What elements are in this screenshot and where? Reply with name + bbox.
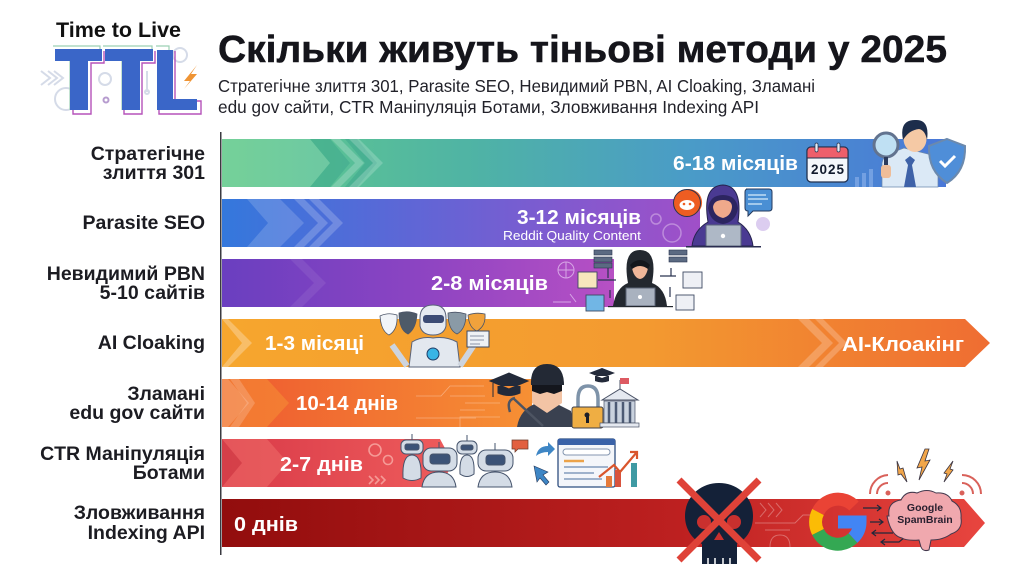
label: Стратегічне злиття 301: злиття 301 bbox=[103, 162, 205, 184]
label: Зламані edu gov: Зламані bbox=[127, 383, 205, 405]
icon: analyst with magnifier and shield bbox=[874, 120, 965, 187]
logo decoration: chevrons and gears bbox=[41, 48, 187, 110]
subtitle bbox=[218, 76, 815, 117]
value: 3-12 місяців bbox=[517, 207, 641, 229]
value: 10-14 днів bbox=[296, 392, 398, 415]
label: AI Cloaking: AI Cloaking bbox=[98, 332, 205, 354]
icon: reddit bubble bbox=[674, 189, 702, 216]
bar: AI Cloaking bbox=[222, 305, 990, 367]
icon: globe and network bbox=[553, 262, 576, 302]
icon: university building bbox=[600, 378, 639, 427]
icon: brain SpamBrain: Google bbox=[907, 502, 943, 514]
chevrons bbox=[222, 439, 288, 487]
icon: browser windows bbox=[578, 272, 702, 311]
label: Indexing API: Indexing API bbox=[88, 522, 205, 544]
icon: signal waves bbox=[870, 475, 981, 494]
bar: Стратегічне злиття 301 bbox=[222, 120, 965, 187]
icon: chat bubble bbox=[745, 189, 772, 216]
red cross bbox=[679, 480, 759, 560]
icon: skull crossed out bbox=[679, 480, 759, 564]
icon: gears bbox=[369, 444, 392, 484]
icon: masks bbox=[380, 312, 485, 335]
bar: Зловживання Indexing API bbox=[222, 449, 985, 564]
subtitle: edu gov сайти, CTR Маніпуляція Ботами, Зловживання Indexing API bbox=[218, 97, 759, 117]
icon: circuit lines bbox=[598, 268, 676, 298]
note: Reddit Quality Content bbox=[503, 229, 642, 243]
label: CTR: Ботами bbox=[133, 462, 205, 484]
label: Стратегічне злиття 301: Стратегічне bbox=[91, 143, 205, 165]
label: Невидимий PBN: Невидимий PBN bbox=[47, 263, 205, 285]
bar: Невидимий PBN bbox=[222, 250, 702, 311]
icon: speech bubble bbox=[512, 440, 528, 452]
subtitle: Стратегічне злиття 301, Parasite SEO, Невидимий PBN, AI Cloaking, Зламані bbox=[218, 76, 815, 96]
logo letters TTL bbox=[55, 49, 197, 110]
icon: robot with document bbox=[392, 305, 489, 367]
circuit lines bbox=[416, 386, 500, 427]
label: Зламані edu gov: edu gov сайти bbox=[69, 402, 205, 424]
value: 6-18 місяців bbox=[673, 152, 798, 175]
bar: CTR Маніпуляція Ботами bbox=[222, 434, 637, 487]
value: 2-8 місяців bbox=[431, 272, 548, 295]
label: Parasite SEO: Parasite SEO bbox=[83, 212, 205, 234]
chevrons bbox=[222, 379, 289, 427]
icon: Google G bbox=[816, 499, 860, 544]
icon: browser search results bbox=[558, 439, 615, 487]
chevrons bbox=[290, 259, 326, 307]
row labels bbox=[40, 143, 205, 544]
logo: Time to Live TTL bbox=[41, 19, 201, 114]
method name: AI-Клоакінг bbox=[842, 334, 964, 356]
icon: brain SpamBrain bbox=[887, 490, 961, 551]
icon: thief bbox=[509, 364, 574, 427]
chevrons bbox=[222, 139, 330, 187]
icon: graduation cap bbox=[490, 373, 528, 397]
bar: Зламані edu gov сайти bbox=[222, 364, 639, 428]
circuit decoration bbox=[755, 503, 813, 547]
icon: data arrows bbox=[863, 505, 905, 545]
label: Indexing API: Зловживання bbox=[74, 502, 205, 524]
title: Скільки живуть тіньові методи у 2025 bbox=[218, 29, 947, 71]
icon: robots bbox=[401, 434, 513, 487]
logo outline: green bbox=[53, 46, 169, 110]
chevrons bbox=[247, 199, 304, 247]
icon: pie chart bbox=[756, 217, 770, 231]
chevrons bbox=[222, 319, 252, 367]
value: 2-7 днів bbox=[280, 454, 363, 476]
axis line bbox=[220, 132, 222, 555]
label: Невидимий PBN: 5-10 сайтів bbox=[100, 282, 205, 304]
icon: gears bbox=[651, 214, 681, 242]
icon: lightning bolts bbox=[897, 449, 953, 482]
value: 1-3 місяці bbox=[265, 333, 364, 355]
icon: dark hooded hacker bbox=[608, 250, 673, 307]
logo caption: Time to Live bbox=[56, 19, 181, 42]
icon: growth chart bbox=[599, 452, 637, 487]
label: CTR: CTR Маніпуляція bbox=[40, 443, 205, 465]
logo outline: purple bbox=[73, 51, 201, 114]
icon: calendar 2025: 2025 bbox=[811, 162, 844, 177]
bar: Parasite SEO bbox=[222, 185, 772, 248]
icon: padlock bbox=[572, 386, 603, 428]
value: 0 днів bbox=[234, 514, 298, 536]
icon: small cap bbox=[589, 368, 615, 382]
icon: calendar 2025 bbox=[807, 143, 848, 182]
icon: servers bbox=[594, 250, 687, 268]
icon: arrow and cursor bbox=[534, 442, 555, 485]
icon: faint chart bbox=[855, 169, 873, 187]
icon: lightning bolt bbox=[184, 65, 197, 89]
icon: brain SpamBrain: SpamBrain bbox=[897, 514, 953, 526]
icon: hooded hacker with laptop bbox=[686, 185, 761, 248]
